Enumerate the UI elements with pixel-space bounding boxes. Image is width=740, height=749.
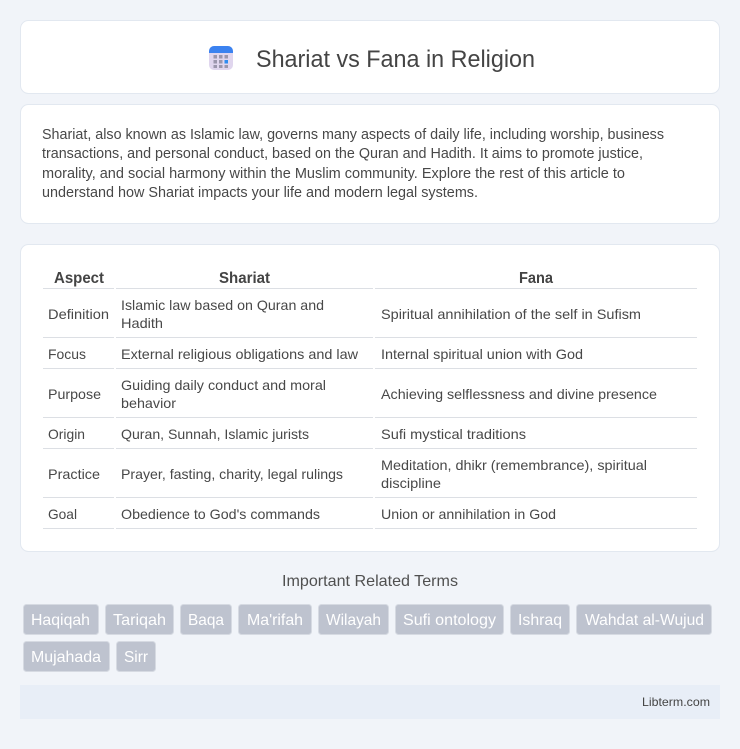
panel: introduction [20, 104, 720, 224]
tag: Ma'rifah [238, 604, 312, 634]
table row: practice: Practice [48, 466, 100, 482]
table row: origin: Origin [48, 426, 85, 442]
title: Shariat vs Fana in Religion [256, 46, 535, 73]
table row: definition: Islamic law based on Quran and [121, 297, 324, 313]
panel: header [20, 20, 720, 94]
text block: introduction [42, 127, 664, 201]
tag: Wilayah: Wilayah [326, 612, 381, 629]
text block: introduction: morality, and social harmony within the Muslim community. Explore the rest of this article to [42, 166, 625, 182]
tag: Mujahada: Mujahada [31, 649, 101, 666]
tag list: related terms [24, 604, 712, 672]
table row: goal: Obedience to God's commands [121, 506, 320, 522]
table row: focus: Internal spiritual union with God [381, 346, 583, 362]
table row: purpose: Achieving selflessness and divine presence [381, 386, 657, 402]
tag: Baqa [180, 604, 232, 634]
text block: introduction: Shariat, also known as Islamic law, governs many aspects of daily life, including worship, business [42, 127, 664, 143]
tag: Wilayah [318, 604, 388, 634]
tag: Sirr: Sirr [124, 649, 149, 666]
table row: focus [48, 346, 583, 362]
heading: important related terms: Important Related Terms [282, 573, 458, 590]
table header row: Aspect [54, 270, 105, 287]
tag: Haqiqah [24, 604, 98, 634]
tag: Wahdat al-Wujud [576, 604, 712, 634]
table row: goal: Goal [48, 506, 77, 522]
text block: introduction: transactions, and personal conduct, based on the Quran and Hadith. It aims to promote justice, [42, 146, 643, 162]
table row: origin: Sufi mystical traditions [381, 426, 526, 442]
tag: Ishraq: Ishraq [518, 612, 562, 629]
tag: Sufi ontology [396, 604, 504, 634]
icon: calendar [209, 46, 233, 70]
footer [20, 685, 720, 719]
table header row: Shariat [219, 270, 271, 287]
table row: definition: Spiritual annihilation of the self in Sufism [381, 306, 641, 322]
table row: practice: discipline [381, 475, 441, 491]
panel: comparison table [20, 244, 720, 552]
table row: focus: External religious obligations and law [121, 346, 359, 362]
table row: purpose: Guiding daily conduct and moral [121, 377, 326, 393]
table header row [54, 270, 553, 287]
tag: Ishraq [510, 604, 570, 634]
table row: purpose: behavior [121, 395, 176, 411]
tag: Tariqah: Tariqah [113, 612, 166, 629]
tag: Haqiqah: Haqiqah [31, 612, 90, 629]
table row: purpose: Purpose [48, 386, 101, 402]
tag: Sirr [116, 642, 156, 672]
table row: origin [48, 426, 526, 442]
text block: introduction: understand how Shariat impacts your life and modern legal systems. [42, 185, 478, 201]
tag: Sufi ontology: Sufi ontology [403, 612, 496, 629]
tag: Mujahada [24, 642, 110, 672]
table row: goal [48, 506, 556, 522]
table row: focus: Focus [48, 346, 86, 362]
table header row: Fana [519, 270, 553, 287]
footer credit: Libterm.com [642, 695, 710, 709]
tag: Baqa: Baqa [188, 612, 224, 629]
table row: purpose [48, 377, 657, 411]
tag: Wahdat al-Wujud: Wahdat al-Wujud [585, 612, 704, 629]
table row: origin: Quran, Sunnah, Islamic jurists [121, 426, 309, 442]
table row: practice [48, 457, 647, 491]
table row: goal: Union or annihilation in God [381, 506, 556, 522]
table row: definition: Definition [48, 306, 109, 322]
table row: definition: Hadith [121, 315, 163, 331]
tag: Tariqah [106, 604, 174, 634]
table row: definition [48, 297, 641, 331]
table row: practice: Meditation, dhikr (remembrance), spiritual [381, 457, 647, 473]
tag: Ma'rifah: Ma'rifah [247, 612, 303, 629]
table row: practice: Prayer, fasting, charity, legal rulings [121, 466, 343, 482]
